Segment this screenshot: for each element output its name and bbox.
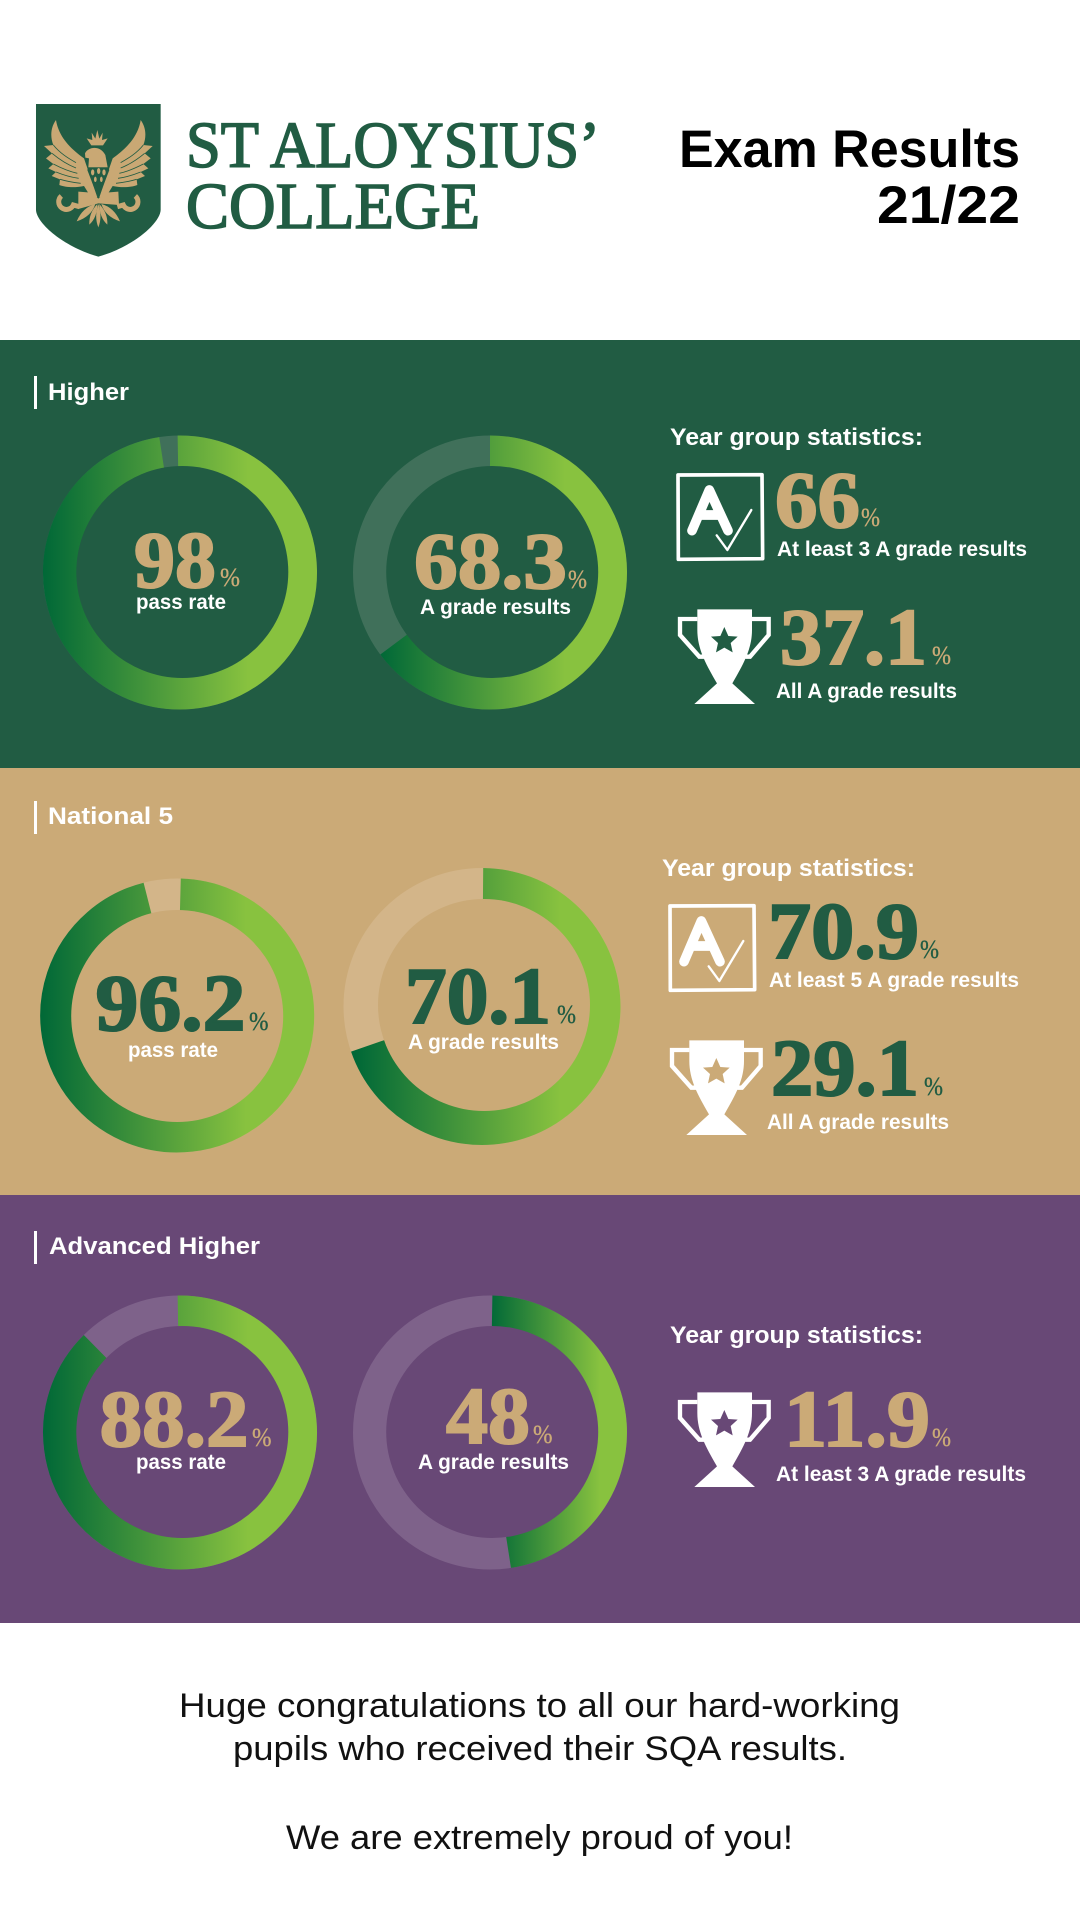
stat: 37.1% all A grade results: 37.1	[780, 592, 927, 682]
icon: school crest shield with eagle	[36, 104, 161, 257]
stat: 11.9% at least 3 A grade results	[776, 1374, 1026, 1486]
donut: 70.1% A grade results: %	[557, 1000, 576, 1029]
heading: National 5: National 5	[48, 803, 173, 830]
donut: 88.2% pass rate: %	[252, 1423, 272, 1452]
stat: 37.1% all A grade results	[776, 592, 957, 703]
college name: ST ALOYSIUS’	[186, 109, 600, 182]
panel: Advanced Higher	[0, 1195, 1080, 1623]
college name	[186, 109, 600, 243]
college name: COLLEGE	[186, 170, 480, 243]
icon: trophy	[680, 1392, 769, 1487]
stat: 29.1% all A grade results: All A grade results	[767, 1111, 949, 1134]
heading: year group statistics: Year group statistics:	[670, 424, 923, 451]
heading: Higher: Higher	[48, 379, 129, 406]
stat: 11.9% at least 3 A grade results: 11.9	[784, 1374, 930, 1464]
stat: 11.9% at least 3 A grade results: %	[932, 1423, 951, 1452]
stat: 70.9% at least 5 A grade results: %	[920, 935, 939, 964]
heading: Higher	[34, 376, 129, 409]
right wing	[99, 120, 153, 197]
closing message	[179, 1687, 900, 1857]
heading: year group statistics: Year group statistics:	[662, 855, 915, 882]
donut: 48% A grade results	[373, 1316, 607, 1550]
year group statistics	[670, 424, 1027, 704]
donut: 98% pass rate	[63, 456, 297, 690]
donut: 48% A grade results: %	[533, 1420, 552, 1449]
stat: 66% at least 3 A grade results	[775, 455, 1027, 561]
stat: 70.9% at least 5 A grade results: At least 5 A grade results	[769, 969, 1019, 992]
icon: trophy	[672, 1040, 761, 1135]
title: Exam Results 21/22: Exam Results	[679, 120, 1020, 179]
donut: 68.3% A grade results: %	[568, 565, 587, 594]
icon: A grade tick box	[678, 475, 763, 559]
year group statistics	[662, 855, 1019, 1135]
donut: 70.1% A grade results	[364, 888, 601, 1125]
donut: 88.2% pass rate: pass rate	[136, 1451, 226, 1474]
icon: trophy	[680, 609, 769, 704]
panel: National 5	[0, 768, 1080, 1195]
closing message: Huge congratulations to all our hard-working	[179, 1687, 900, 1725]
stat: 29.1% all A grade results	[767, 1023, 949, 1134]
donut: 96.2% pass rate	[60, 898, 294, 1133]
donut: 88.2% pass rate: 88.2	[100, 1374, 249, 1464]
stat: 70.9% at least 5 A grade results: 70.9	[768, 886, 919, 976]
stat: 37.1% all A grade results: All A grade results	[776, 680, 957, 703]
stat: 29.1% all A grade results: %	[924, 1072, 943, 1101]
stat: 66% at least 3 A grade results: At least 3 A grade results	[777, 538, 1027, 561]
stat: 66% at least 3 A grade results: 66	[775, 455, 860, 545]
donut: 48% A grade results: 48	[446, 1371, 530, 1461]
heading: Advanced Higher: Advanced Higher	[49, 1233, 260, 1260]
stat: 70.9% at least 5 A grade results	[768, 886, 1019, 992]
donut: 70.1% A grade results: 70.1	[405, 951, 551, 1041]
year group statistics	[670, 1322, 1026, 1487]
donut: 68.3% A grade results: 68.3	[414, 516, 567, 606]
stat: 37.1% all A grade results: %	[932, 641, 951, 670]
donut: 70.1% A grade results: A grade results	[408, 1031, 559, 1054]
closing message: pupils who received their SQA results.	[233, 1730, 847, 1768]
title: Exam Results 21/22	[679, 120, 1020, 235]
title: Exam Results 21/22: 21/22	[877, 176, 1020, 235]
panel: Higher	[0, 340, 1080, 768]
heading: National 5	[34, 801, 173, 834]
donut: 98% pass rate: %	[220, 563, 240, 592]
closing message: We are extremely proud of you!	[286, 1819, 793, 1857]
heading: year group statistics: Year group statistics:	[670, 1322, 923, 1349]
donut: 68.3% A grade results: A grade results	[420, 596, 571, 619]
donut: 96.2% pass rate: 96.2	[96, 958, 246, 1048]
stat: 11.9% at least 3 A grade results: At least 3 A grade results	[776, 1463, 1026, 1486]
icon: A grade tick box	[670, 906, 755, 990]
stat: 29.1% all A grade results: 29.1	[771, 1023, 919, 1113]
donut: 96.2% pass rate: pass rate	[128, 1039, 218, 1062]
donut: 68.3% A grade results	[373, 456, 607, 690]
stat: 66% at least 3 A grade results: %	[861, 503, 880, 532]
donut: 88.2% pass rate	[63, 1316, 297, 1550]
donut: 96.2% pass rate: %	[249, 1007, 268, 1036]
left wing	[44, 120, 97, 197]
donut: 98% pass rate: pass rate	[136, 591, 226, 614]
donut: 48% A grade results: A grade results	[418, 1451, 569, 1474]
header	[36, 104, 1020, 257]
donut: 98% pass rate: 98	[134, 515, 216, 605]
